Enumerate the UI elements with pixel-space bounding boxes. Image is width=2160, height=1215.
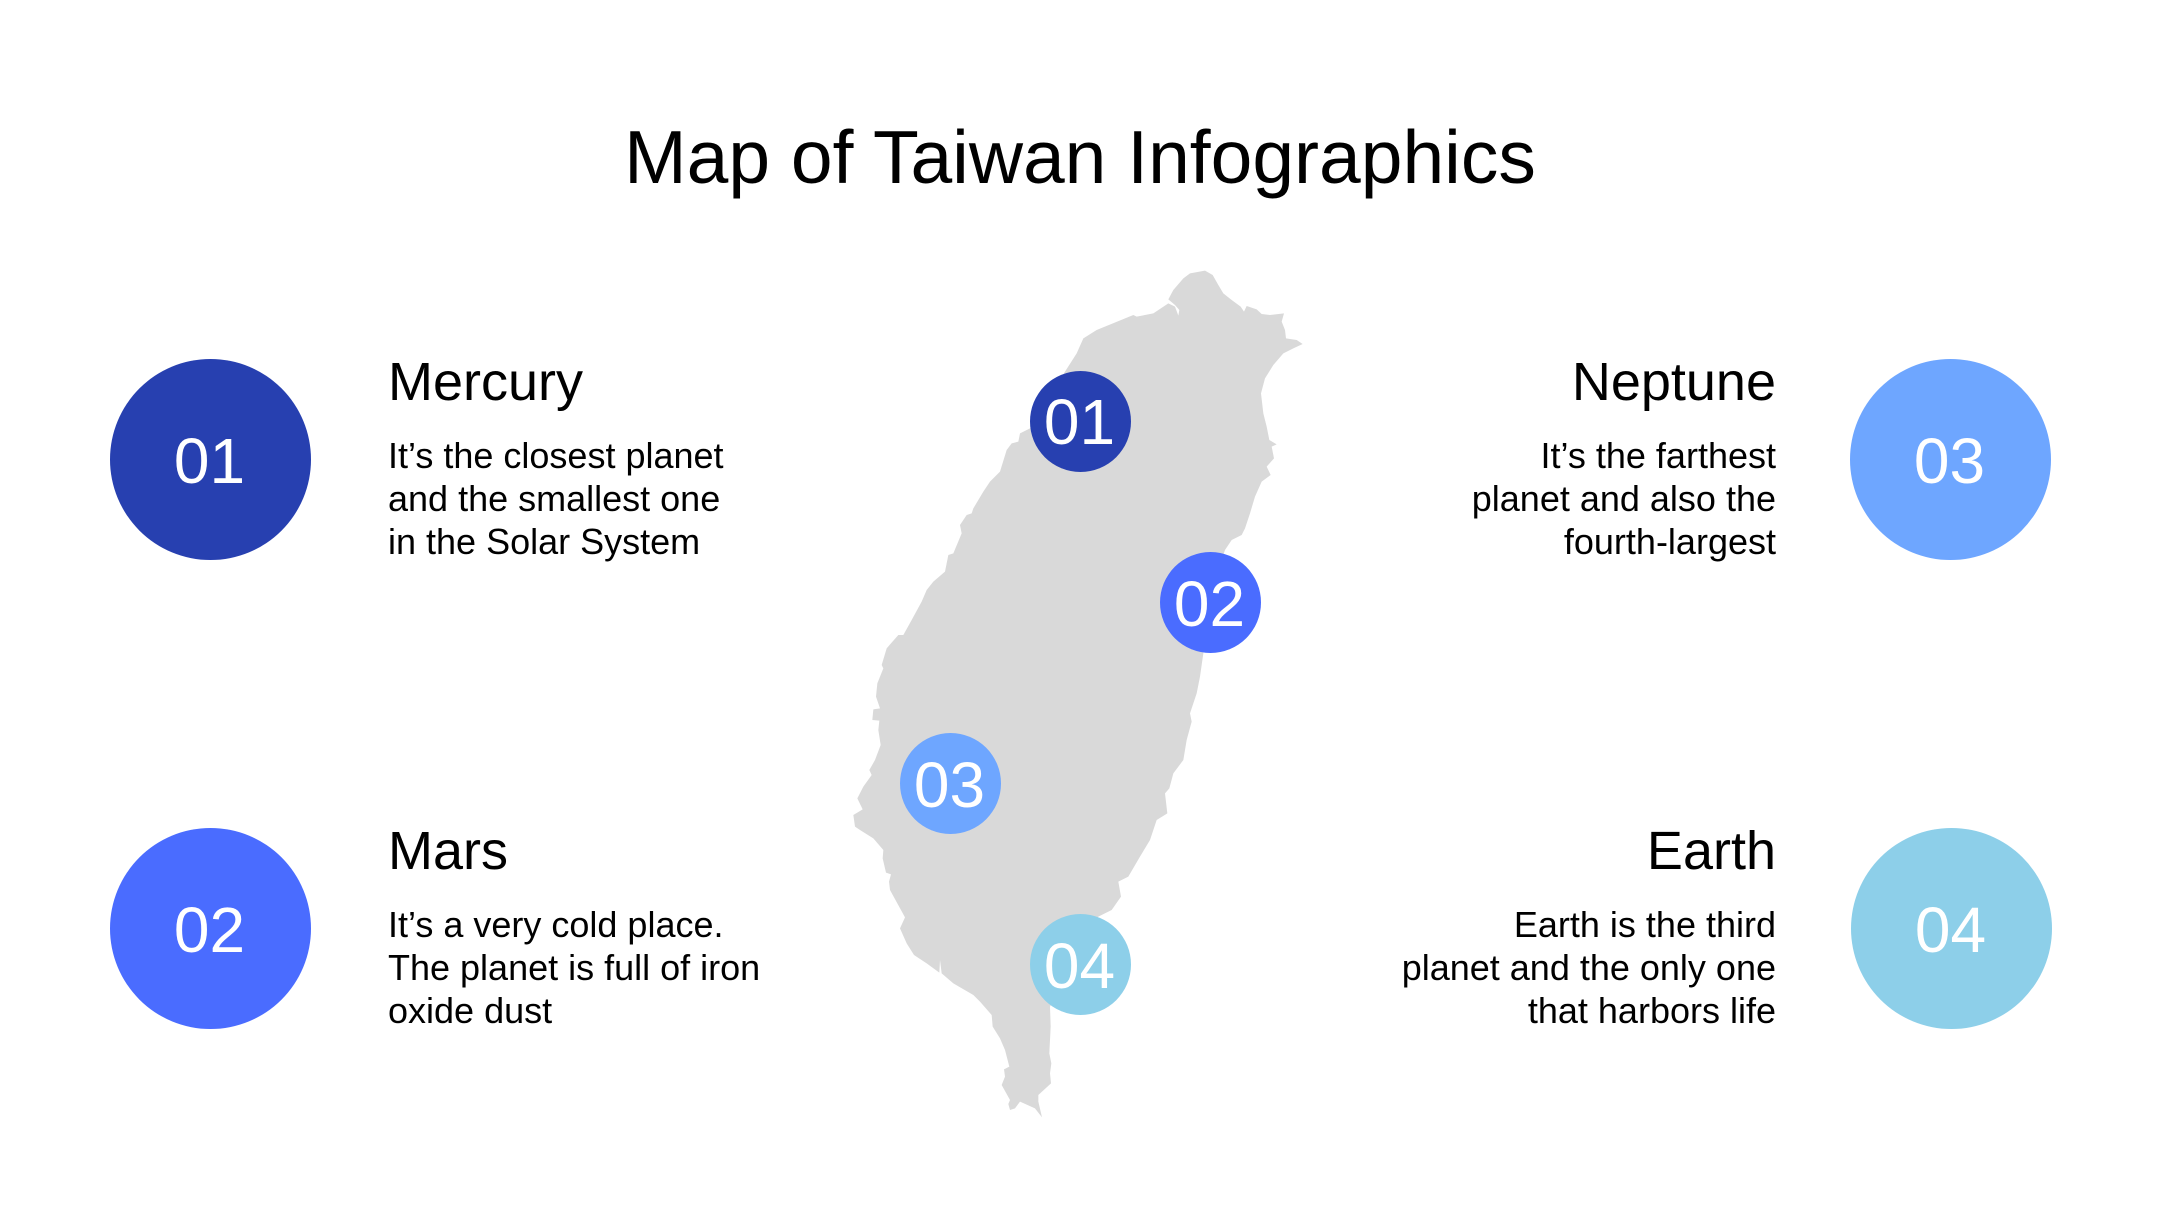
heading: Mars: Mars (388, 820, 508, 880)
text: Mars: It’s a very cold place. (388, 904, 724, 944)
number circle 04: 04 (1915, 894, 1986, 966)
heading: Earth: Earth (1647, 820, 1776, 880)
text: Neptune: fourth-largest (1564, 521, 1776, 562)
map marker 02: 02 (1174, 568, 1245, 640)
title: Map of Taiwan Infographics (624, 115, 1536, 199)
number circle 03: 03 (1914, 425, 1985, 497)
text: Neptune (1472, 434, 1776, 562)
number circle 01 (110, 359, 311, 560)
number circle 02: 02 (174, 894, 245, 966)
text: Earth (1402, 904, 1776, 1031)
map marker 04: 04 (1044, 930, 1115, 1002)
text: Earth: Earth is the third (1514, 904, 1776, 944)
text: Mars (388, 904, 760, 1031)
map marker 04 (1030, 914, 1131, 1015)
heading: Mercury: Mercury (388, 352, 583, 412)
map marker 03 (900, 733, 1001, 834)
text: Mars: oxide dust (388, 990, 552, 1031)
number circle 01: 01 (174, 425, 245, 497)
heading: Neptune: Neptune (1572, 352, 1776, 412)
text: Earth: that harbors life (1528, 990, 1776, 1031)
map marker 01: 01 (1044, 386, 1115, 458)
map marker 01 (1030, 370, 1131, 472)
text: Mercury: It’s the closest planet (388, 434, 724, 476)
map of Taiwan (853, 270, 1302, 1117)
number circle 02 (110, 828, 311, 1029)
text: Mercury: and the smallest one (388, 478, 720, 519)
text: Mercury (388, 434, 724, 562)
text: Neptune: It’s the farthest (1541, 434, 1776, 476)
number circle 03 (1850, 359, 2051, 560)
text: Earth: planet and the only one (1402, 947, 1776, 988)
text: Mercury: in the Solar System (388, 521, 700, 562)
map marker 03: 03 (914, 748, 985, 820)
map marker 02 (1160, 552, 1261, 653)
text: Mars: The planet is full of iron (388, 947, 760, 988)
number circle 04 (1851, 828, 2052, 1029)
text: Neptune: planet and also the (1472, 478, 1776, 519)
